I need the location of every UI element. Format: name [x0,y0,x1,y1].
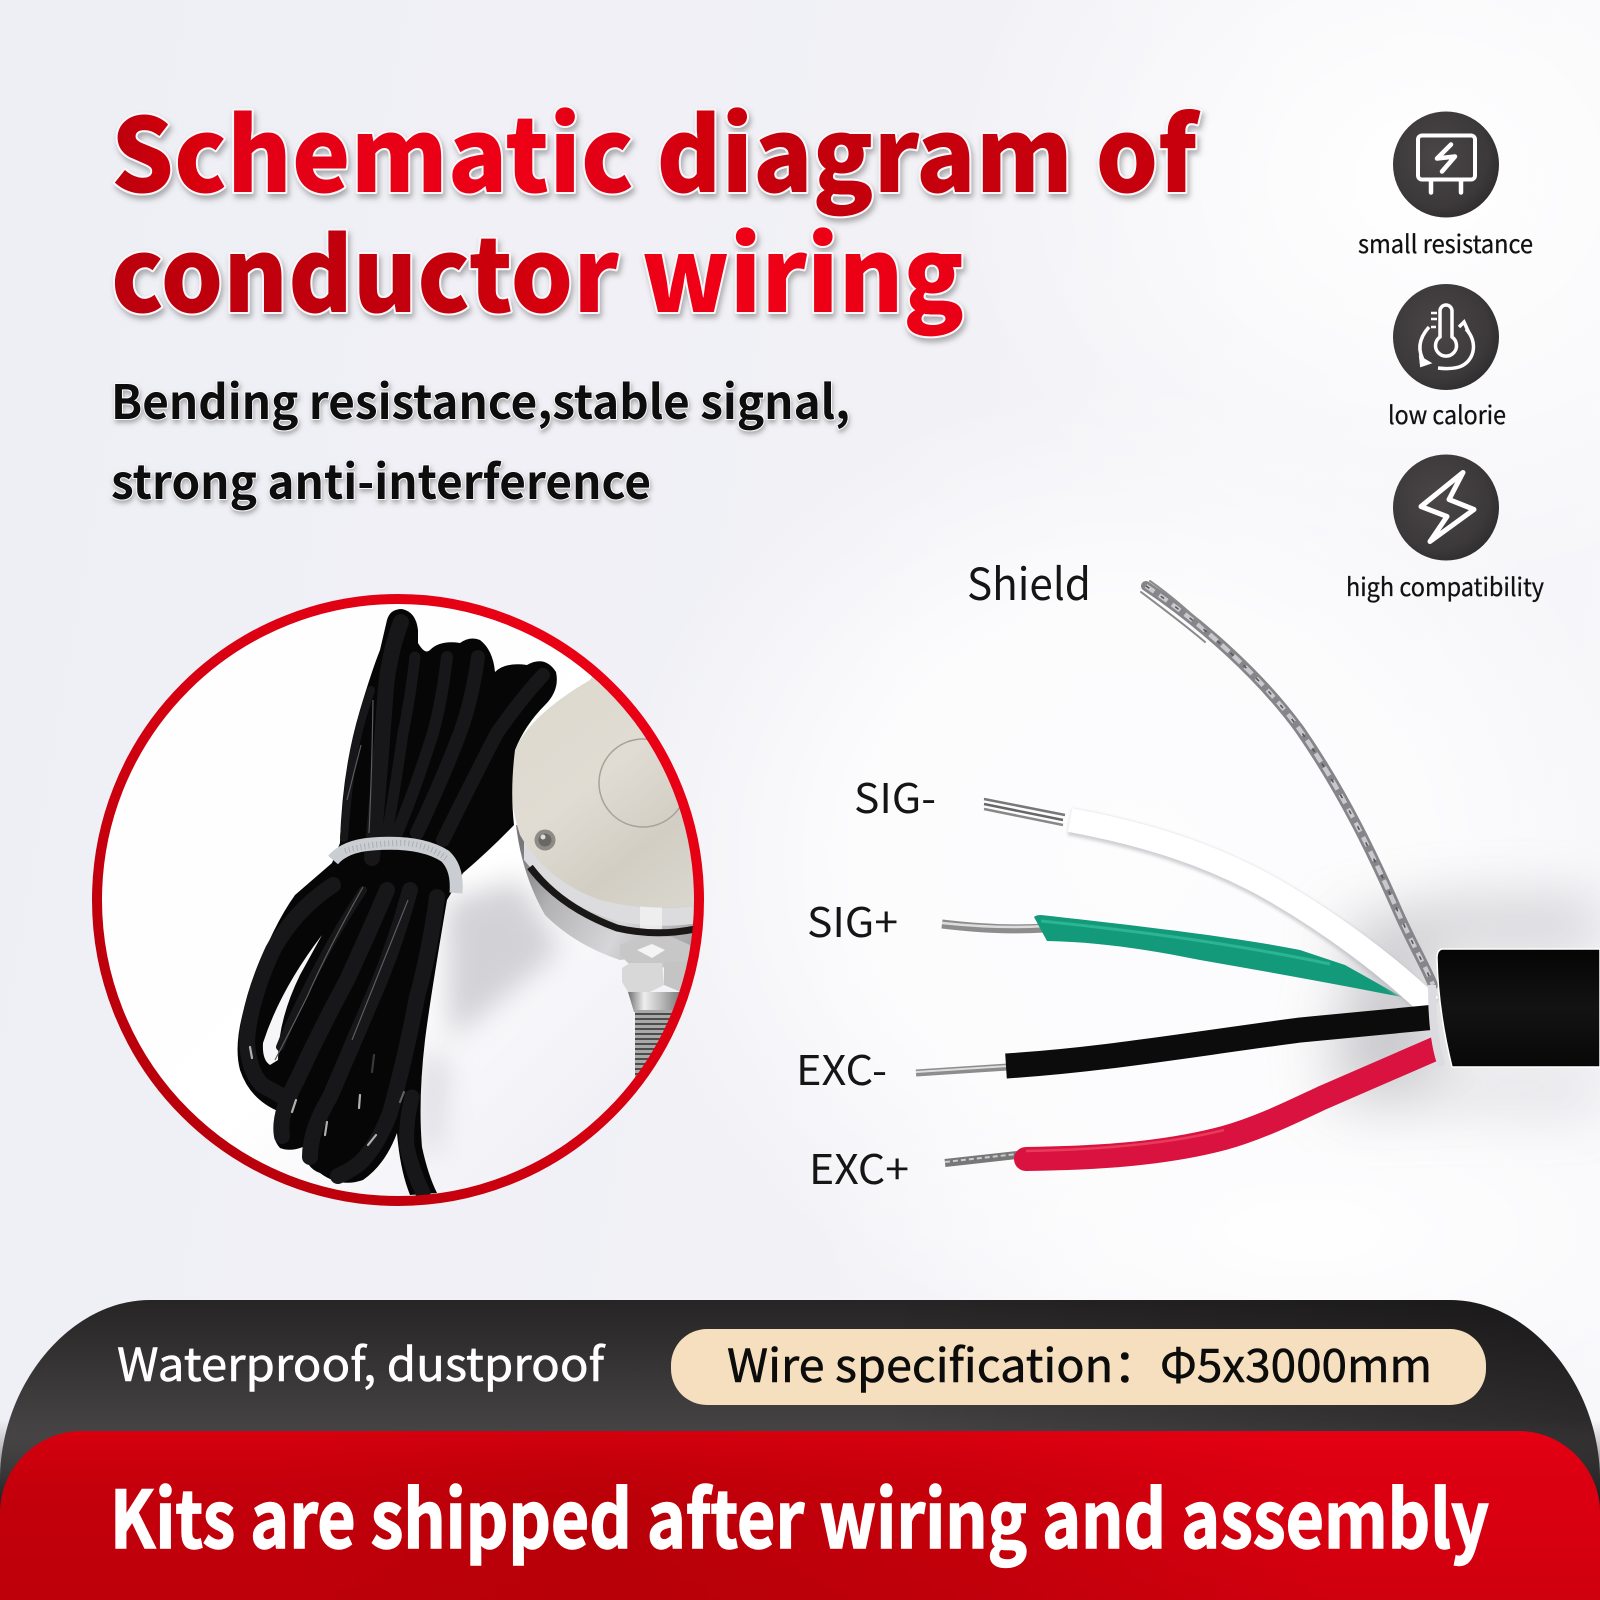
subtitle: strong anti-interference [111,444,651,513]
black EXC- wire [916,1017,1436,1073]
wire specification pill: Wire specification： [727,1330,1160,1396]
soft shadow near cable [1320,905,1600,1110]
red EXC+ wire [945,1048,1437,1171]
zip tie [333,843,456,893]
load cell sensor [512,676,694,1078]
label: small resistance: small resistance [1358,225,1533,261]
label: EXC+: EXC+ [809,1136,909,1196]
title [111,75,1201,342]
black coiled cable [238,609,557,1195]
label: EXC-: EXC- [796,1037,887,1097]
label: SIG+: SIG+ [807,889,898,949]
icon: low calorie [1393,284,1499,390]
product photo circle [97,599,704,1201]
soft shadows on backdrop [420,880,560,1150]
black jacket cable [1437,949,1600,1067]
icon: small resistance [1393,112,1499,218]
shield wire [1141,581,1433,985]
subtitle: Bending resistance,stable signal, [111,364,850,433]
white SIG- wire [984,799,1430,1008]
subtitle [111,364,850,513]
bottom band: dark [0,1300,1600,1600]
cable gland [620,937,692,968]
title: Schematic diagram of [111,75,1201,222]
label: Shield: Shield [967,549,1091,613]
green SIG+ wire [942,915,1402,997]
waterproof text: Waterproof, dustproof [117,1329,606,1395]
wire specification pill [671,1329,1486,1405]
gap in left loop [263,935,322,1065]
label: low calorie: low calorie [1388,396,1506,432]
bottom band: red [0,1431,1600,1600]
foil wrap [1432,985,1442,1066]
label: high compatibility: high compatibility [1346,568,1544,604]
wire specification pill: Φ5x3000mm [1160,1330,1432,1396]
icon: high compatibility [1393,454,1499,560]
wire labels [796,549,1091,1196]
label: SIG-: SIG- [854,765,936,825]
wire diagram [796,549,1600,1196]
title: conductor wiring [111,195,964,342]
feature icons [1346,112,1544,604]
